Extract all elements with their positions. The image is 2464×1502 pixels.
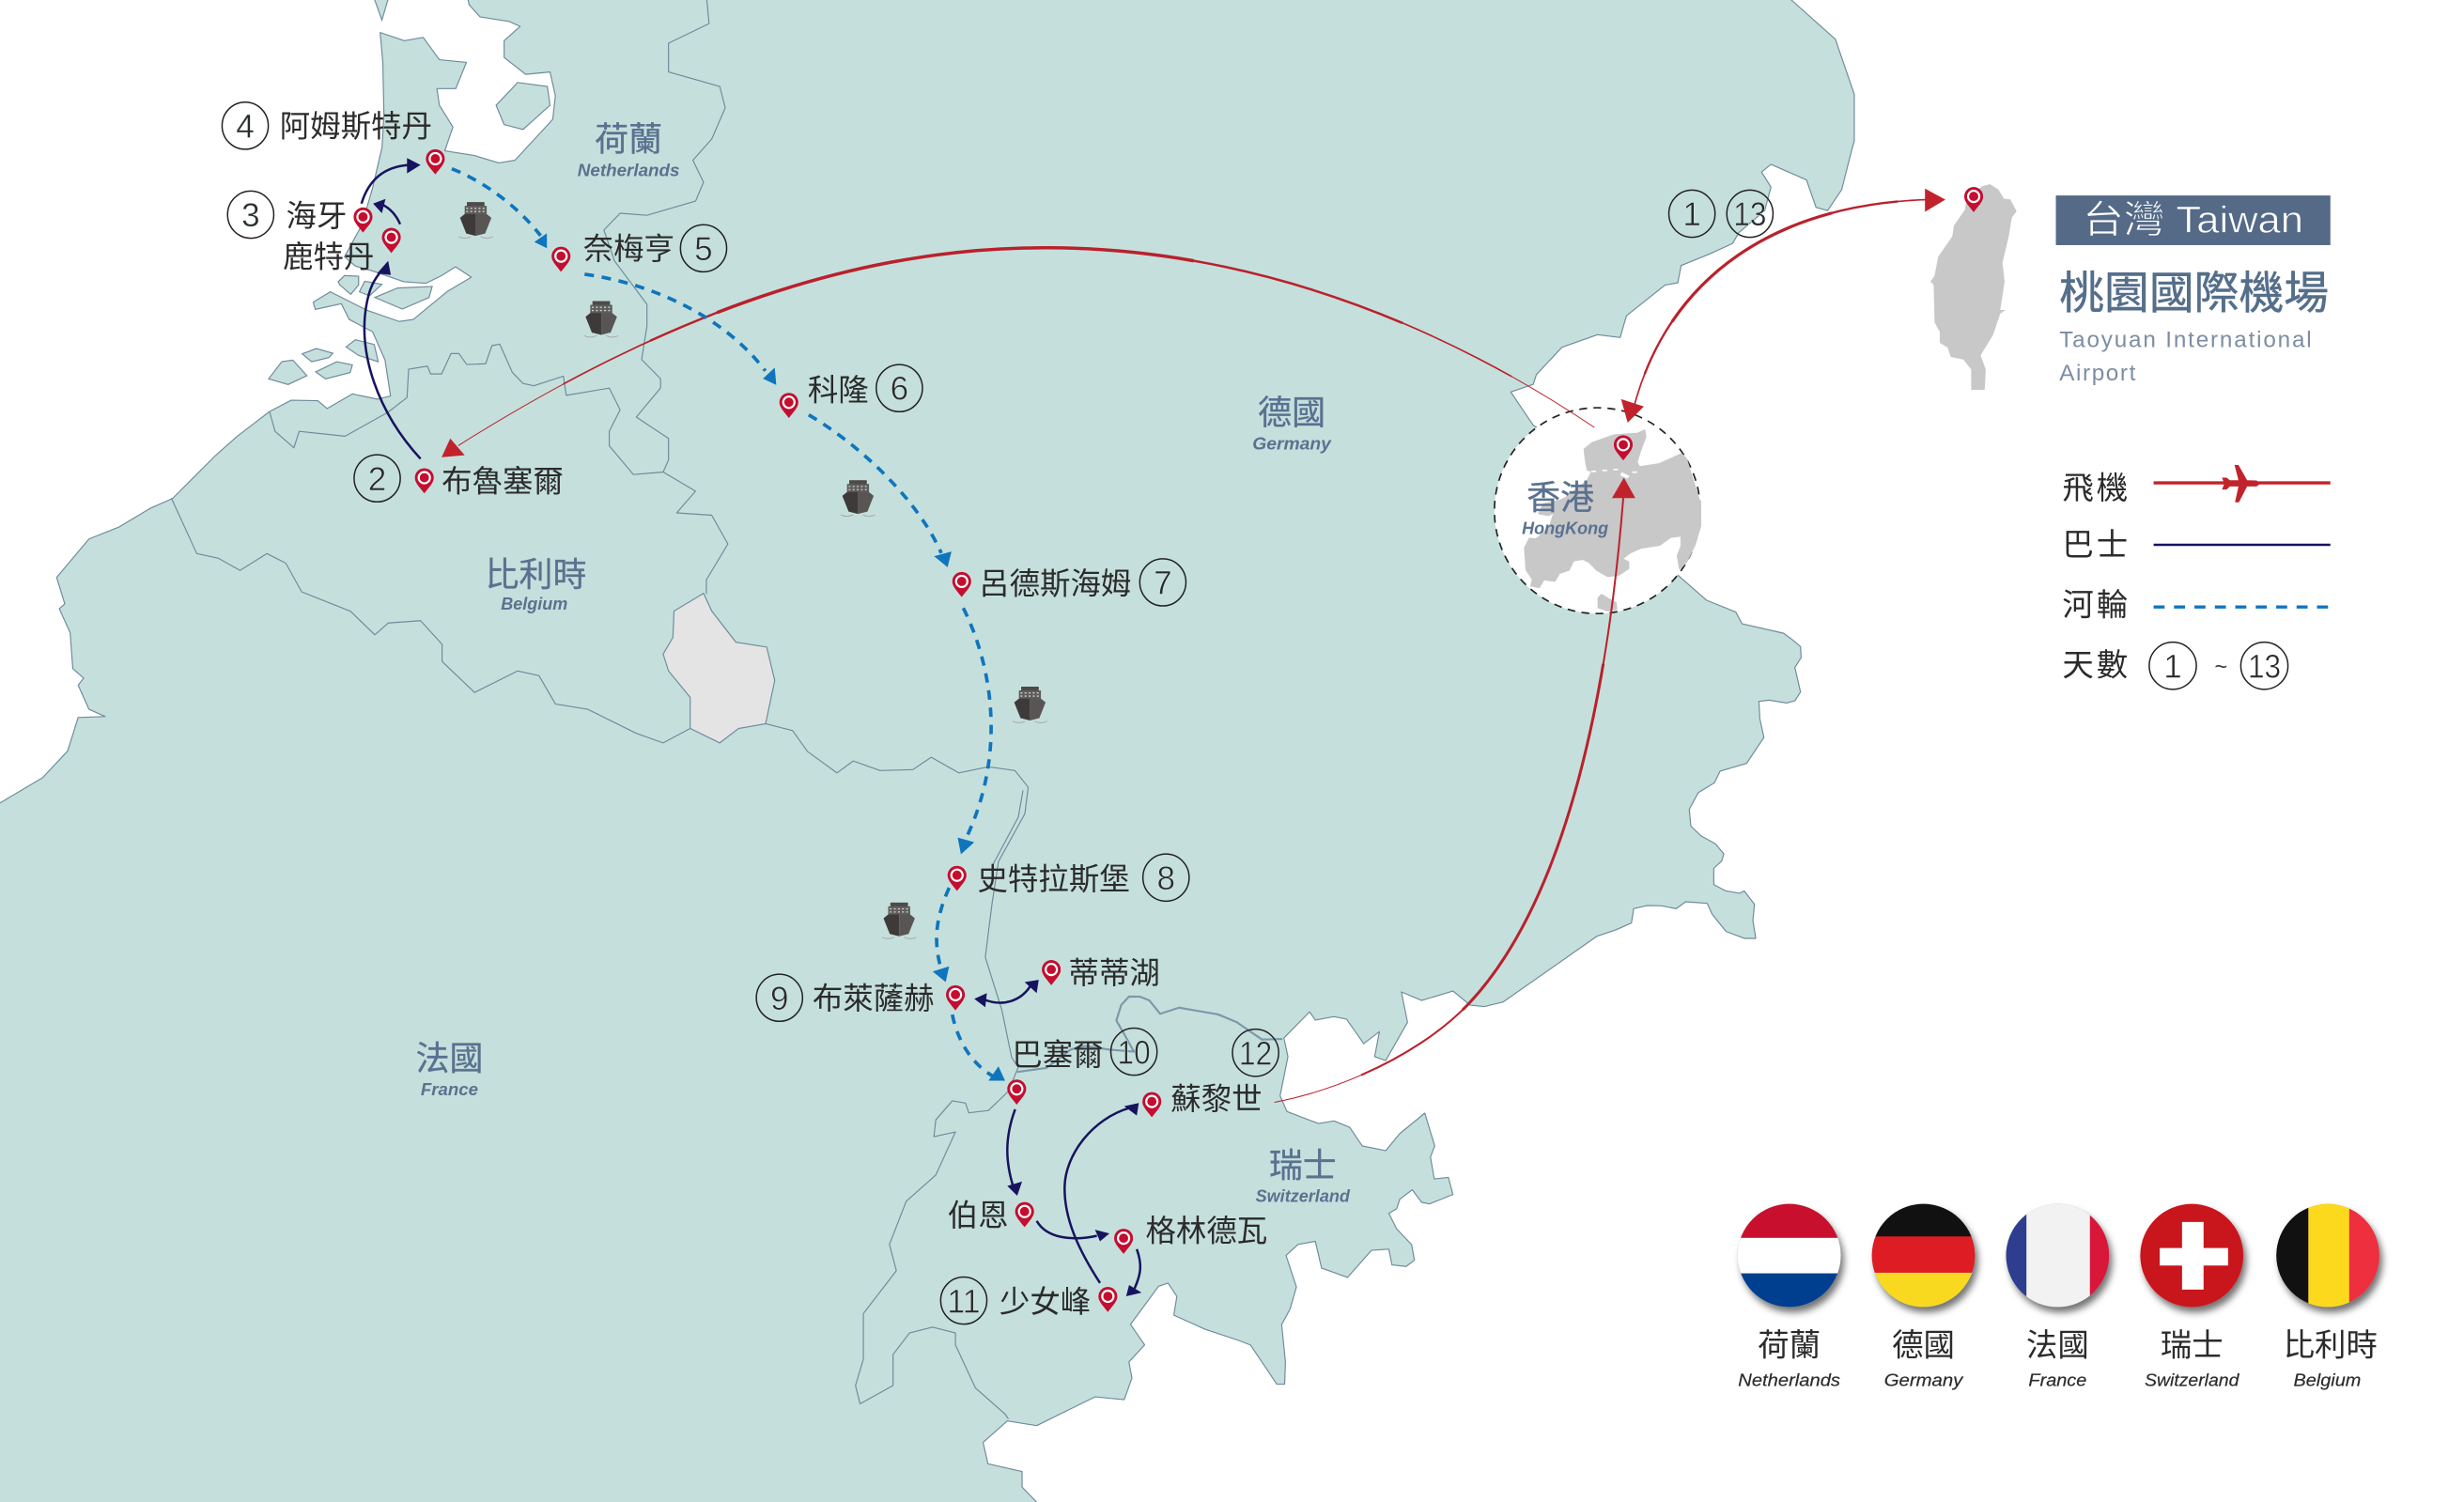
stop: Jungfrau, day 11 bbox=[940, 1277, 1117, 1324]
label: Belgium: 比利時 bbox=[486, 555, 586, 594]
flag: Germany: Germany bbox=[1884, 1370, 1964, 1389]
base map of Europe bbox=[0, 0, 1854, 1502]
stop: Rudesheim, day 7 bbox=[953, 559, 1186, 606]
legend: plane: 飛機 bbox=[2062, 472, 2128, 506]
panel: Taiwan airport bbox=[2056, 195, 2331, 386]
stop: Breisach, day 9: 布萊薩赫 bbox=[813, 982, 935, 1015]
stop: Rotterdam: 鹿特丹 bbox=[283, 240, 374, 273]
stop: Basel, day 10 bbox=[1007, 1028, 1157, 1105]
river: Amsterdam to Nijmegen bbox=[452, 169, 547, 248]
stop: Titisee: 蒂蒂湖 bbox=[1069, 956, 1160, 990]
stop: Cologne, day 6: 科隆 bbox=[808, 374, 869, 408]
bus: Breisach and Titisee bbox=[974, 980, 1039, 1007]
stop: Rudesheim, day 7: 呂德斯海姆 bbox=[979, 566, 1131, 600]
bus: Jungfrau to Zurich bbox=[1064, 1103, 1139, 1283]
stop: Breisach, day 9 bbox=[756, 974, 965, 1021]
label: Germany bbox=[1252, 394, 1332, 453]
legend: days: ~ bbox=[2215, 655, 2227, 679]
pin: Taiwan bbox=[1964, 187, 1983, 212]
label: France: France bbox=[421, 1079, 478, 1099]
cruise ship icon bbox=[1013, 687, 1047, 722]
river: Rudesheim to Strasbourg bbox=[957, 608, 991, 854]
stop: Brussels, day 2 bbox=[354, 455, 564, 502]
airport name: 桃園國際機場 bbox=[2059, 270, 2329, 319]
bus: Bern to Grindelwald bbox=[1037, 1221, 1109, 1241]
stop: Grindelwald bbox=[1114, 1214, 1267, 1254]
bus: Brussels to Rotterdam bbox=[364, 261, 421, 458]
label: Switzerland: Switzerland bbox=[1256, 1186, 1351, 1206]
flag: Netherlands bbox=[1736, 1203, 1842, 1389]
stop: Brussels, day 2: 2 bbox=[368, 461, 386, 498]
cruise ship icon bbox=[458, 202, 493, 239]
stop: Cologne, day 6 bbox=[780, 364, 922, 418]
small islands bbox=[269, 0, 550, 384]
flag: Netherlands: 荷蘭 bbox=[1758, 1329, 1821, 1364]
stop: Cologne, day 6: 6 bbox=[891, 371, 908, 408]
flag: Netherlands: Netherlands bbox=[1738, 1370, 1840, 1389]
Taiwan badge: 台灣 Taiwan bbox=[2083, 199, 2303, 241]
cruise ship icon bbox=[882, 903, 917, 938]
stop: Strasbourg, day 8 bbox=[948, 854, 1189, 901]
Luxembourg bbox=[663, 594, 775, 743]
stop: Rotterdam bbox=[283, 228, 401, 273]
stop: Breisach, day 9: 9 bbox=[770, 981, 789, 1017]
flag: Switzerland: Switzerland bbox=[2145, 1370, 2239, 1389]
label: Belgium: Belgium bbox=[501, 594, 567, 613]
label: Switzerland bbox=[1256, 1146, 1351, 1206]
stop: The Hague, day 3: 3 bbox=[241, 197, 260, 234]
flight: Hong Kong to Brussels bbox=[442, 248, 1594, 457]
bus routes bbox=[362, 158, 1141, 1296]
legend: plane bbox=[2062, 465, 2331, 506]
land mass bbox=[0, 0, 1854, 1502]
stop: Basel, day 10: 巴塞爾 bbox=[1012, 1038, 1104, 1072]
stop: Bern: 伯恩 bbox=[948, 1199, 1009, 1232]
stop: Brussels, day 2: 布魯塞爾 bbox=[442, 465, 564, 499]
stop: Zurich, day 12 bbox=[1142, 1030, 1278, 1117]
legend: days bbox=[2062, 643, 2288, 689]
day markers 1 and 13: 1 bbox=[1682, 196, 1701, 233]
stop: Strasbourg, day 8: 8 bbox=[1156, 860, 1175, 897]
stop: Amsterdam, day 4: 阿姆斯特丹 bbox=[280, 110, 432, 144]
flag: Germany: 德國 bbox=[1892, 1329, 1955, 1364]
bus: Basel to Bern bbox=[1007, 1109, 1022, 1196]
flag: Switzerland bbox=[2140, 1204, 2243, 1389]
pin: Hong Kong bbox=[1614, 435, 1633, 460]
label: Netherlands: 荷蘭 bbox=[595, 120, 662, 159]
label: Germany: 德國 bbox=[1258, 394, 1325, 432]
country borders bbox=[171, 0, 1282, 1419]
Hong Kong landmass bbox=[1525, 430, 1700, 611]
Taiwan badge bbox=[2056, 195, 2331, 245]
river: Nijmegen to Cologne bbox=[584, 274, 776, 385]
stop: Nijmegen, day 5: 奈梅亨 bbox=[583, 232, 674, 266]
stop: Nijmegen, day 5 bbox=[551, 225, 727, 271]
flag: Belgium bbox=[2275, 1203, 2380, 1389]
legend: river cruise: 河輪 bbox=[2062, 589, 2128, 624]
flag: France bbox=[2006, 1203, 2111, 1389]
legend: days: 天數 bbox=[2062, 648, 2128, 683]
label: Germany: Germany bbox=[1252, 433, 1332, 453]
label: Netherlands bbox=[578, 120, 680, 179]
label: Hong Kong bbox=[1522, 478, 1608, 538]
legend bbox=[2062, 465, 2331, 689]
airport English name bbox=[2059, 328, 2312, 386]
label: Netherlands: Netherlands bbox=[578, 160, 680, 179]
stop: Amsterdam, day 4: 4 bbox=[236, 108, 255, 145]
stop: Basel, day 10: 10 bbox=[1118, 1034, 1151, 1071]
flight: Zurich to Hong Kong bbox=[1275, 478, 1635, 1102]
stop: Zurich, day 12: 12 bbox=[1239, 1035, 1272, 1072]
label: France: 法國 bbox=[416, 1039, 483, 1077]
label: Hong Kong: HongKong bbox=[1522, 519, 1608, 538]
stop: Strasbourg, day 8: 史特拉斯堡 bbox=[978, 862, 1130, 896]
day markers 1 and 13: 13 bbox=[1733, 196, 1766, 233]
cruise ship icon bbox=[584, 302, 618, 337]
label: Hong Kong: 香港 bbox=[1526, 478, 1594, 517]
legend: days: 13 bbox=[2248, 648, 2281, 685]
legend: bus: 巴士 bbox=[2062, 528, 2128, 563]
stop: Rudesheim, day 7: 7 bbox=[1154, 565, 1172, 601]
river: Strasbourg to Breisach bbox=[933, 888, 949, 982]
legend: days: 1 bbox=[2163, 648, 2182, 685]
bus: The Hague to Amsterdam bbox=[362, 158, 421, 204]
bus: Grindelwald to Jungfrau bbox=[1126, 1249, 1141, 1296]
cruise ship icon bbox=[841, 480, 876, 517]
stop: Grindelwald: 格林德瓦 bbox=[1145, 1214, 1267, 1247]
river cruise routes bbox=[452, 169, 1005, 1081]
label: Switzerland: 瑞士 bbox=[1269, 1146, 1337, 1185]
stop: Amsterdam, day 4 bbox=[222, 102, 444, 175]
airport English name: Taoyuan International bbox=[2059, 328, 2312, 353]
flag: Germany bbox=[1871, 1203, 1976, 1389]
stop: The Hague, day 3: 海牙 bbox=[286, 199, 347, 233]
label: Belgium bbox=[486, 555, 586, 613]
flight: Taiwan and Hong Kong bbox=[1621, 189, 1945, 423]
stop: Jungfrau, day 11: 少女峰 bbox=[1000, 1285, 1091, 1319]
bus: Rotterdam to The Hague bbox=[373, 199, 400, 225]
label: France bbox=[416, 1039, 483, 1099]
stop: Nijmegen, day 5: 5 bbox=[694, 231, 713, 268]
day markers 1 and 13 bbox=[1669, 190, 1773, 238]
stop: Jungfrau, day 11: 11 bbox=[947, 1283, 981, 1320]
flag row bbox=[1736, 1203, 2380, 1389]
flag: France: France bbox=[2028, 1370, 2086, 1389]
flag: France: 法國 bbox=[2026, 1329, 2089, 1364]
river: Cologne to Rudesheim bbox=[809, 415, 952, 567]
flag: Belgium: Belgium bbox=[2293, 1370, 2361, 1389]
flag: Switzerland: 瑞士 bbox=[2161, 1329, 2224, 1364]
flag: Belgium: 比利時 bbox=[2284, 1329, 2378, 1364]
Taiwan silhouette bbox=[1930, 184, 2017, 390]
stop: The Hague, day 3 bbox=[227, 191, 372, 239]
stop: Zurich, day 12: 蘇黎世 bbox=[1170, 1082, 1263, 1116]
Hong Kong inset circle bbox=[1495, 408, 1700, 613]
river: Breisach to Basel bbox=[953, 1014, 1005, 1081]
airport English name: Airport bbox=[2059, 361, 2136, 386]
